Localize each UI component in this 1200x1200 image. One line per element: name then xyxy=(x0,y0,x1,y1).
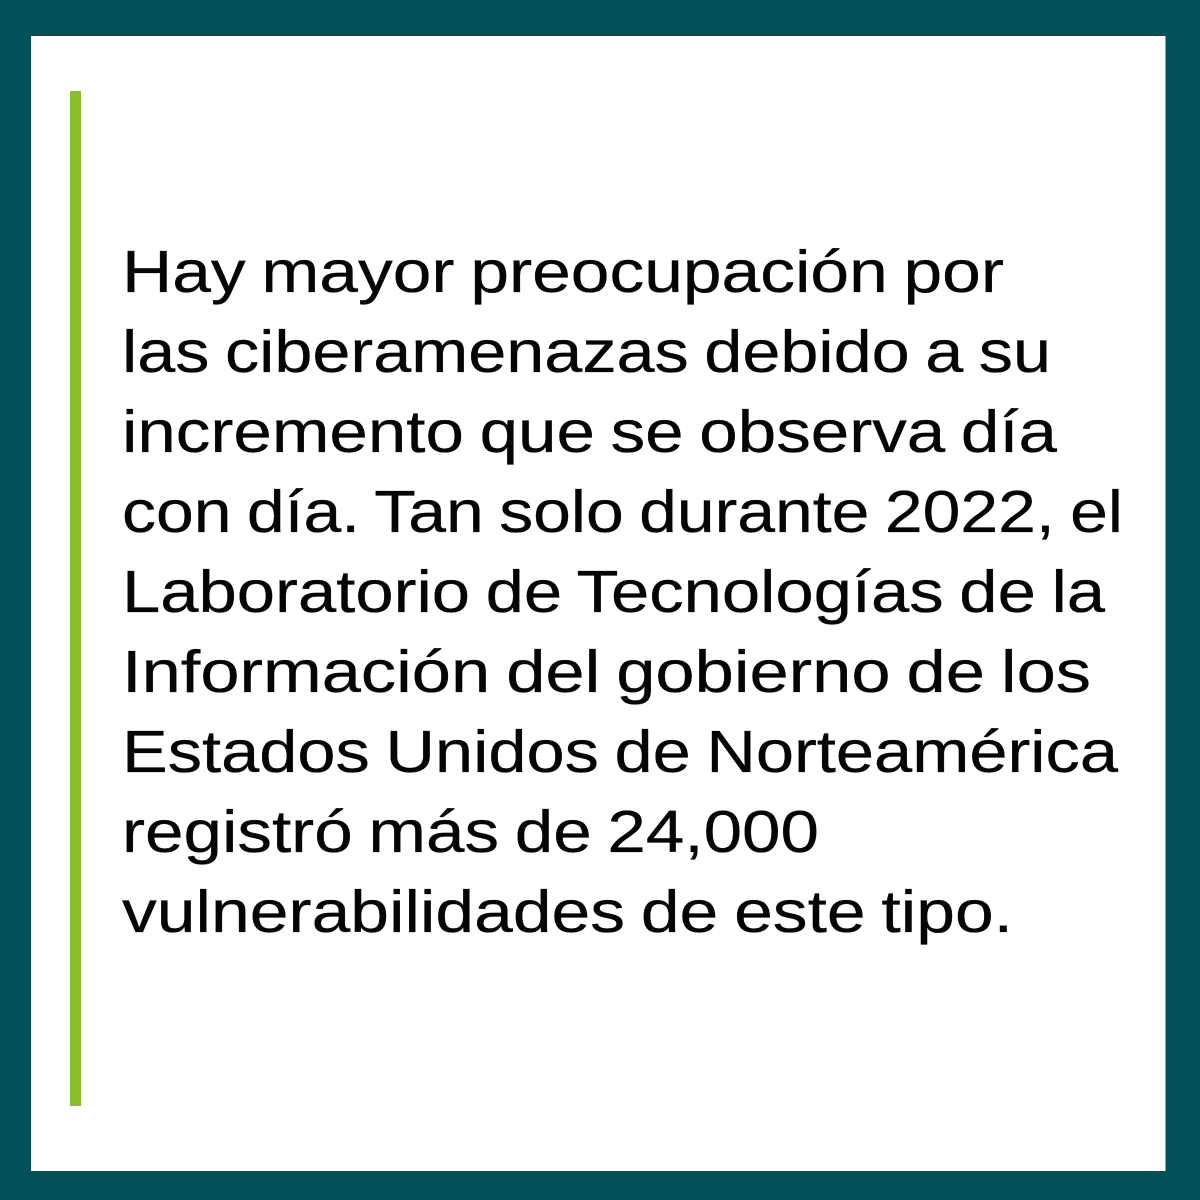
text block: cyber threats statement: vulnerabilidades de este tipo. xyxy=(122,879,1013,945)
text block: cyber threats statement xyxy=(122,239,1123,945)
text block: cyber threats statement: registró más de 24,000 xyxy=(122,799,819,865)
text block: cyber threats statement: Información del gobierno de los xyxy=(122,639,1091,705)
text block: cyber threats statement: incremento que se observa día xyxy=(122,399,1057,465)
text block: cyber threats statement: las ciberamenazas debido a su xyxy=(122,319,1051,385)
text block: cyber threats statement: Laboratorio de Tecnologías de la xyxy=(122,559,1105,625)
text block: cyber threats statement: Hay mayor preocupación por xyxy=(122,239,1004,305)
green accent bar xyxy=(70,91,81,1106)
text block: cyber threats statement: Estados Unidos de Norteamérica xyxy=(122,719,1118,785)
text block: cyber threats statement: con día. Tan solo durante 2022, el xyxy=(122,479,1123,545)
